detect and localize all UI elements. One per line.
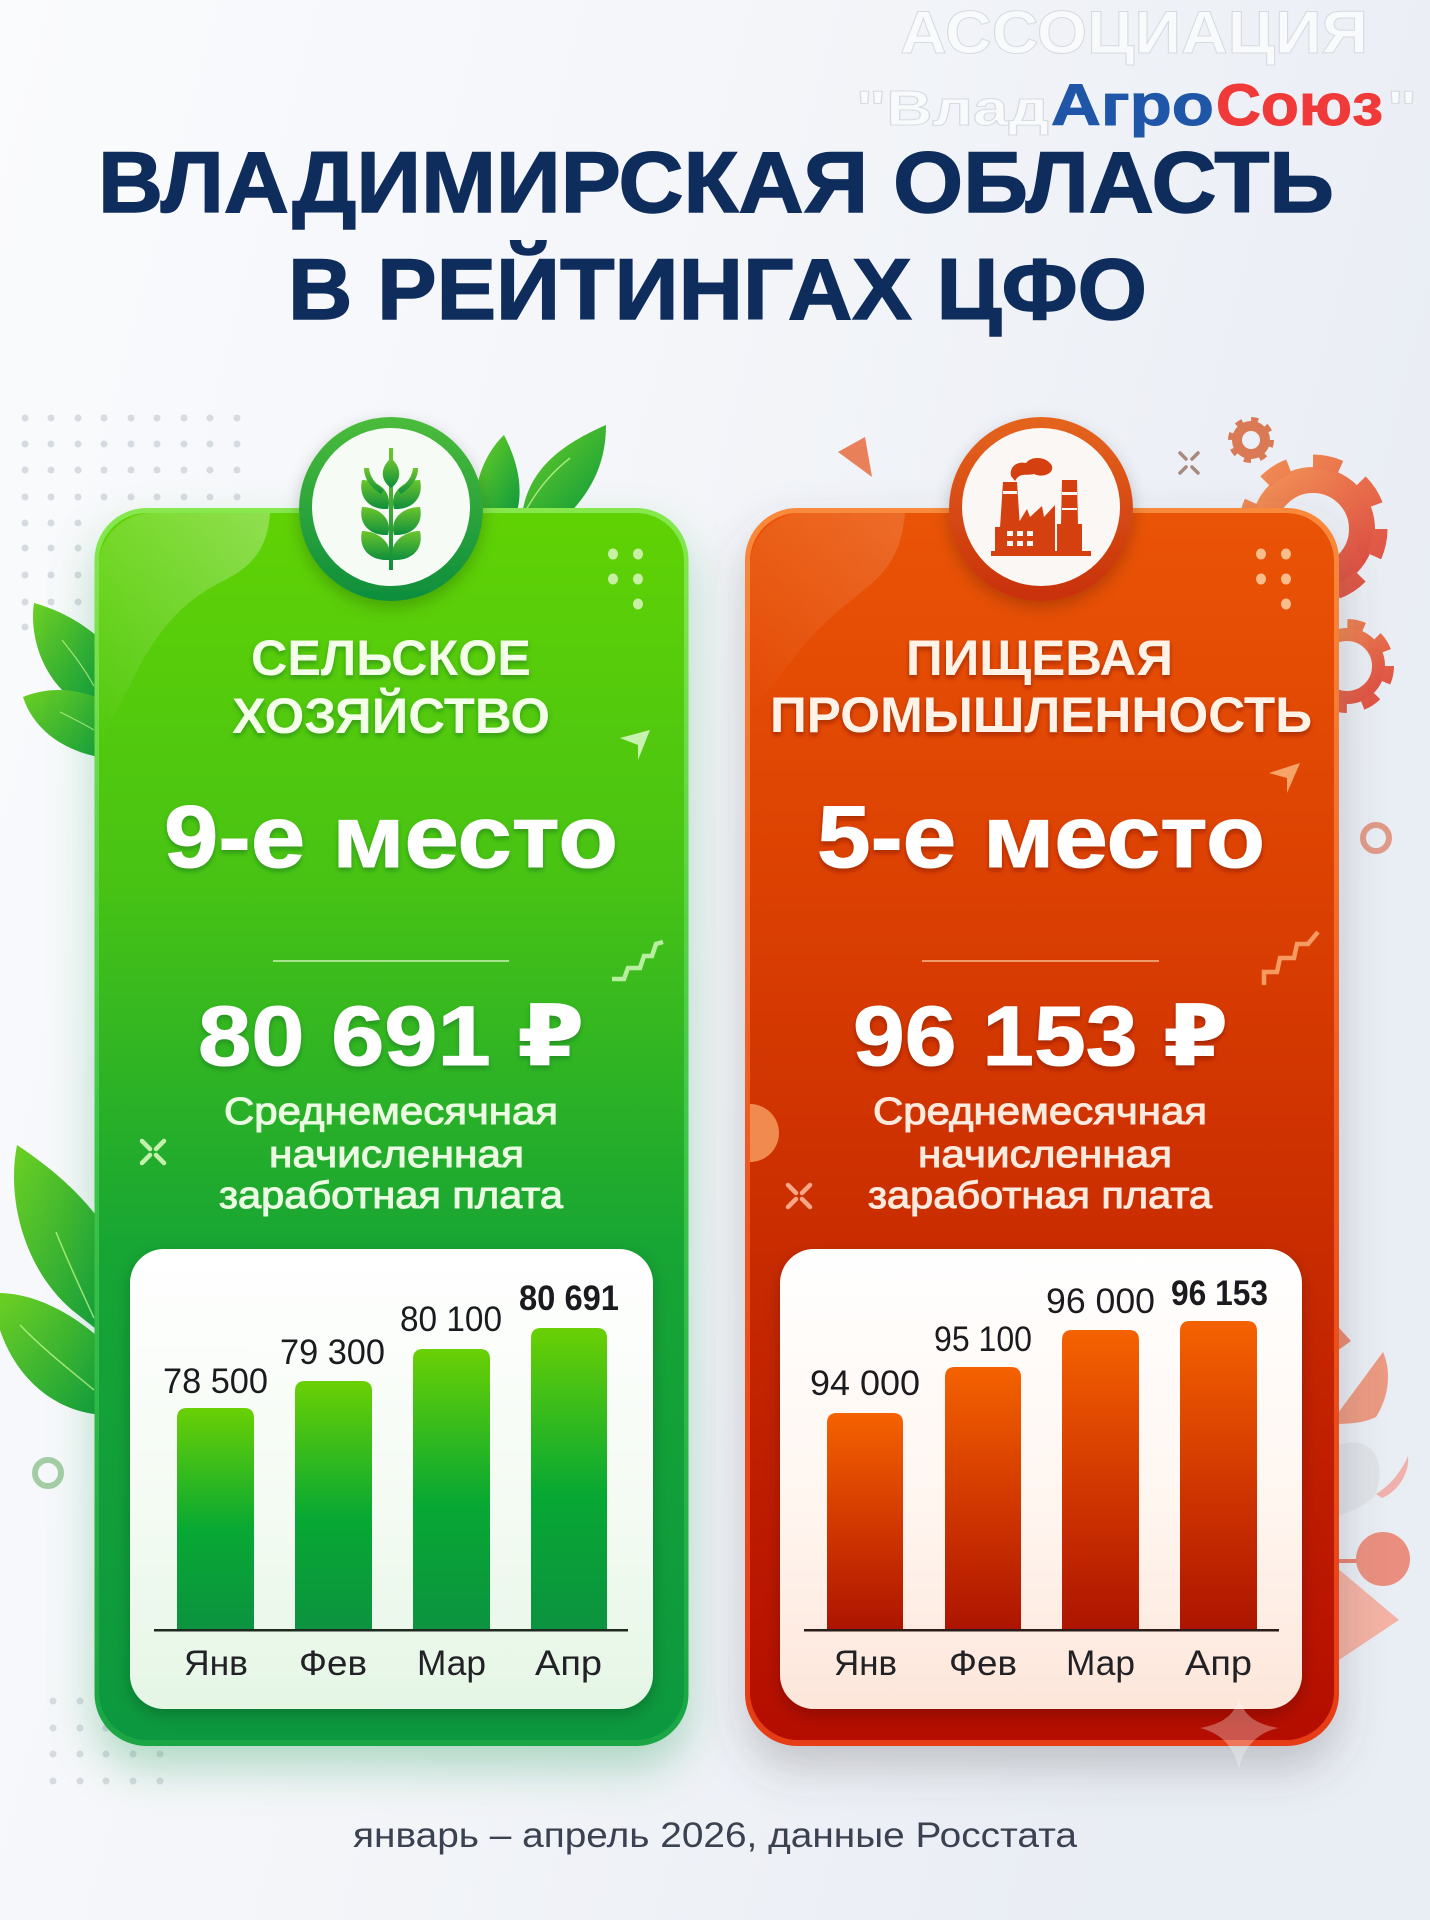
- chart: food industry wages: Апр: [1185, 1644, 1252, 1683]
- icon: stairs: [612, 942, 663, 979]
- rank: 9th place: 9-е место: [164, 787, 618, 886]
- chart: food industry wages: 96 000: [1046, 1282, 1155, 1321]
- title: В РЕЙТИНГАХ ЦФО: [288, 241, 1147, 338]
- bar Jan: [827, 1413, 903, 1630]
- chart: food industry wages: Янв: [834, 1644, 897, 1683]
- icon: paper arrow orange: [1269, 763, 1300, 793]
- salary value orange: 96 153 ₽: [853, 989, 1228, 1083]
- watermark logo: ВладАгроСоюз: [856, 0, 1417, 138]
- chart: agriculture wages: [130, 1249, 653, 1709]
- icon: sparkle cross orange: [788, 1185, 810, 1207]
- icon: factory badge: [949, 417, 1133, 601]
- bar Apr: [1180, 1321, 1257, 1630]
- heading: agriculture: ХОЗЯЙСТВО: [232, 687, 550, 744]
- chart: agriculture wages: 80 691: [519, 1279, 619, 1318]
- title: [98, 135, 1334, 338]
- icon: ring orange: [1363, 825, 1389, 851]
- decorative shapes right of orange card: [1330, 1318, 1410, 1666]
- chart: agriculture wages: Апр: [535, 1644, 602, 1683]
- icon: triangle orange: [838, 437, 872, 477]
- chart: food industry wages: Фев: [949, 1644, 1017, 1683]
- panel: food industry card: [745, 508, 1339, 1768]
- chart: food industry wages: 96 153: [1171, 1274, 1268, 1313]
- bar Jan: [177, 1408, 254, 1630]
- chart: agriculture wages: 79 300: [280, 1333, 385, 1372]
- salary caption orange: [868, 1091, 1213, 1217]
- chart: agriculture wages: Янв: [184, 1644, 248, 1683]
- salary caption orange: начисленная: [918, 1134, 1172, 1176]
- decor: dots in green card: [608, 548, 643, 610]
- title: ВЛАДИМИРСКАЯ ОБЛАСТЬ: [98, 135, 1334, 231]
- heading: agriculture: СЕЛЬСКОЕ: [251, 630, 531, 686]
- salary caption orange: Среднемесячная: [873, 1091, 1207, 1133]
- watermark logo: ВладАгроСоюз: "Влад: [856, 82, 1049, 136]
- heading: food industry: [770, 630, 1312, 743]
- icon: leaves behind green card top right: [475, 425, 606, 515]
- icon: big gear: [1246, 462, 1380, 596]
- bar Mar: [413, 1349, 490, 1630]
- bar Apr: [531, 1328, 607, 1630]
- heading: food industry: ПИЩЕВАЯ: [906, 630, 1173, 686]
- chart: agriculture wages: 78 500: [163, 1362, 268, 1401]
- salary caption orange: заработная плата: [868, 1175, 1213, 1217]
- heading: agriculture: [232, 630, 550, 744]
- watermark logo: ВладАгроСоюз: ": [1387, 82, 1417, 136]
- salary caption: заработная плата: [219, 1175, 564, 1217]
- icon: half circle: [750, 1104, 779, 1162]
- salary caption: начисленная: [269, 1134, 524, 1176]
- chart: food industry wages: [780, 1249, 1302, 1709]
- icon: small gear: [1231, 420, 1271, 460]
- chart: agriculture wages: Фев: [299, 1644, 367, 1683]
- icon: paper arrow: [620, 730, 650, 760]
- icon: leaves left of green card upper: [23, 603, 110, 765]
- chart: food industry wages: 94 000: [810, 1364, 920, 1403]
- icon: wheat badge: [299, 417, 483, 601]
- icon: stairs orange: [1264, 932, 1318, 985]
- salary caption: Среднемесячная: [224, 1091, 558, 1133]
- chart: agriculture wages: 80 100: [400, 1300, 502, 1339]
- icon: leaves left of green card lower: [0, 1145, 110, 1415]
- icon: sparkle cross top: [1180, 453, 1198, 473]
- bar Feb: [295, 1381, 372, 1630]
- footnote: source: январь – апрель 2026, данные Росстата: [353, 1816, 1078, 1855]
- icon: star sparkle: [1200, 1698, 1278, 1768]
- watermark logo: ВладАгроСоюз: АССОЦИАЦИЯ: [900, 0, 1368, 66]
- chart: agriculture wages: Мар: [417, 1644, 486, 1683]
- salary caption: [219, 1091, 564, 1217]
- watermark logo: ВладАгроСоюз: Союз: [1216, 73, 1383, 138]
- chart: food industry wages: 95 100: [934, 1320, 1032, 1359]
- heading: food industry: ПРОМЫШЛЕННОСТЬ: [770, 687, 1312, 743]
- panel: agriculture card: [94, 508, 688, 1746]
- chart: food industry wages: Мар: [1066, 1644, 1135, 1683]
- icon: lower gear: [1305, 624, 1389, 708]
- bar Mar: [1062, 1330, 1139, 1630]
- icon: ring green: [35, 1460, 61, 1486]
- salary value: 80 691 ₽: [198, 989, 584, 1083]
- watermark logo: ВладАгроСоюз: Агро: [1051, 73, 1214, 138]
- bar Feb: [945, 1367, 1021, 1630]
- decor: dots in orange card: [1256, 548, 1291, 610]
- icon: sparkle cross: [142, 1141, 164, 1163]
- rank: 5th place: 5-е место: [817, 787, 1265, 886]
